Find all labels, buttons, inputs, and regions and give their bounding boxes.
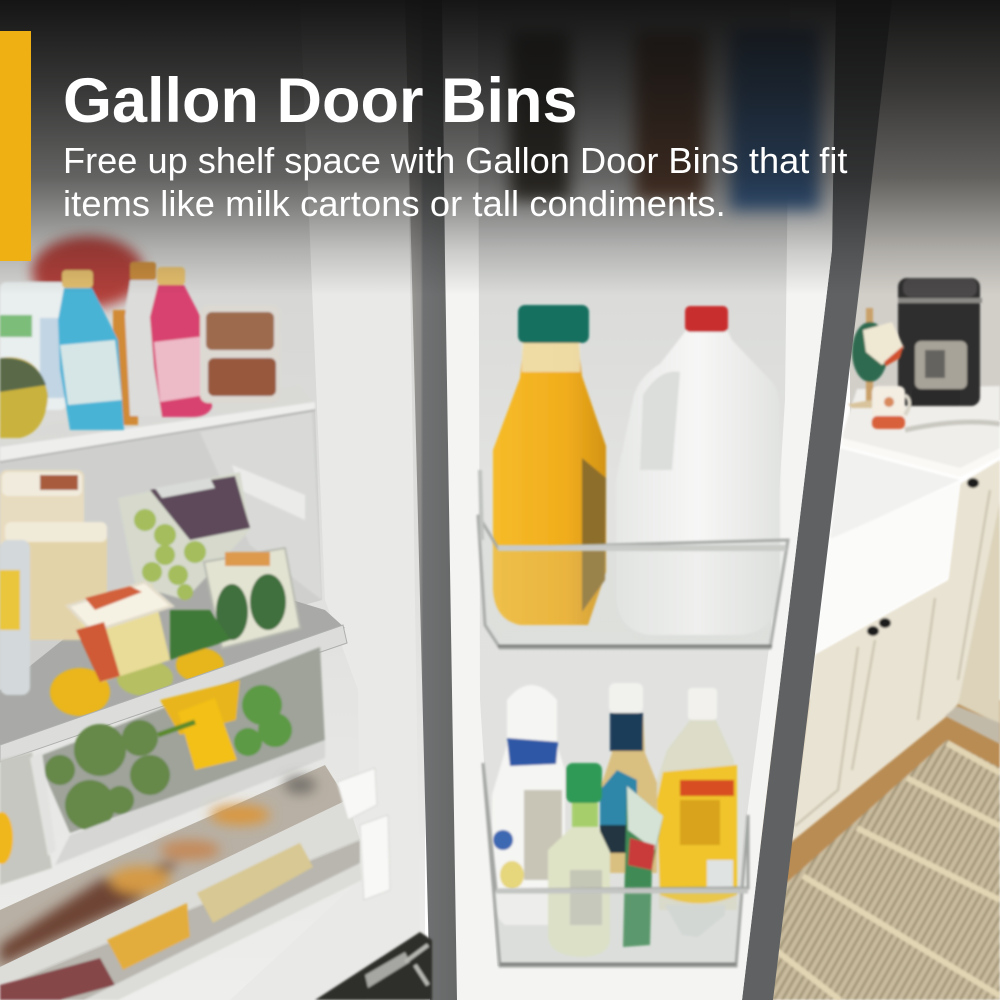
gallon milk jug (616, 306, 780, 635)
top shelf (0, 385, 315, 462)
description text: items like milk cartons or tall condiments. (63, 183, 726, 224)
description text (63, 140, 848, 224)
blurred upper door shelf items (510, 25, 820, 210)
counter top (842, 386, 1000, 477)
crisper drawer with vegetables (0, 647, 325, 885)
top dark overlay (0, 0, 1000, 295)
kitchen cabinets (790, 460, 1000, 843)
lower door bin (483, 763, 748, 966)
mugs on wooden stand (848, 308, 910, 429)
hinge side door edge (405, 0, 457, 1000)
back wall below top shelf (0, 408, 322, 690)
door inner flange (440, 0, 836, 1000)
upper door bin (478, 470, 788, 648)
middle shelf front rail (0, 625, 347, 762)
title: Gallon Door Bins (63, 66, 578, 136)
door liner panel (478, 0, 790, 966)
accent bar (0, 31, 31, 261)
top shelf items (0, 236, 280, 438)
woven rug and wood floor (760, 700, 1000, 1000)
farmhouse sink (815, 448, 960, 654)
fridge cabinet wall (0, 0, 425, 1000)
kitchen wall (850, 0, 1000, 420)
fridge side wall (230, 0, 420, 1000)
lower blurred drawer (0, 765, 360, 987)
coffee maker (898, 278, 982, 406)
hinge hardware (315, 932, 432, 1000)
middle shelf items (0, 470, 300, 716)
description text: Free up shelf space with Gallon Door Bins that fit (63, 140, 847, 181)
door steel outer edge (742, 0, 892, 1000)
orange juice bottle (493, 305, 606, 625)
lower drawer with cheese and meat (0, 840, 362, 1000)
side wall brackets (200, 412, 322, 600)
lower door bottles (492, 683, 737, 957)
middle shelf glass (0, 575, 345, 745)
crisper side tabs (337, 768, 390, 900)
